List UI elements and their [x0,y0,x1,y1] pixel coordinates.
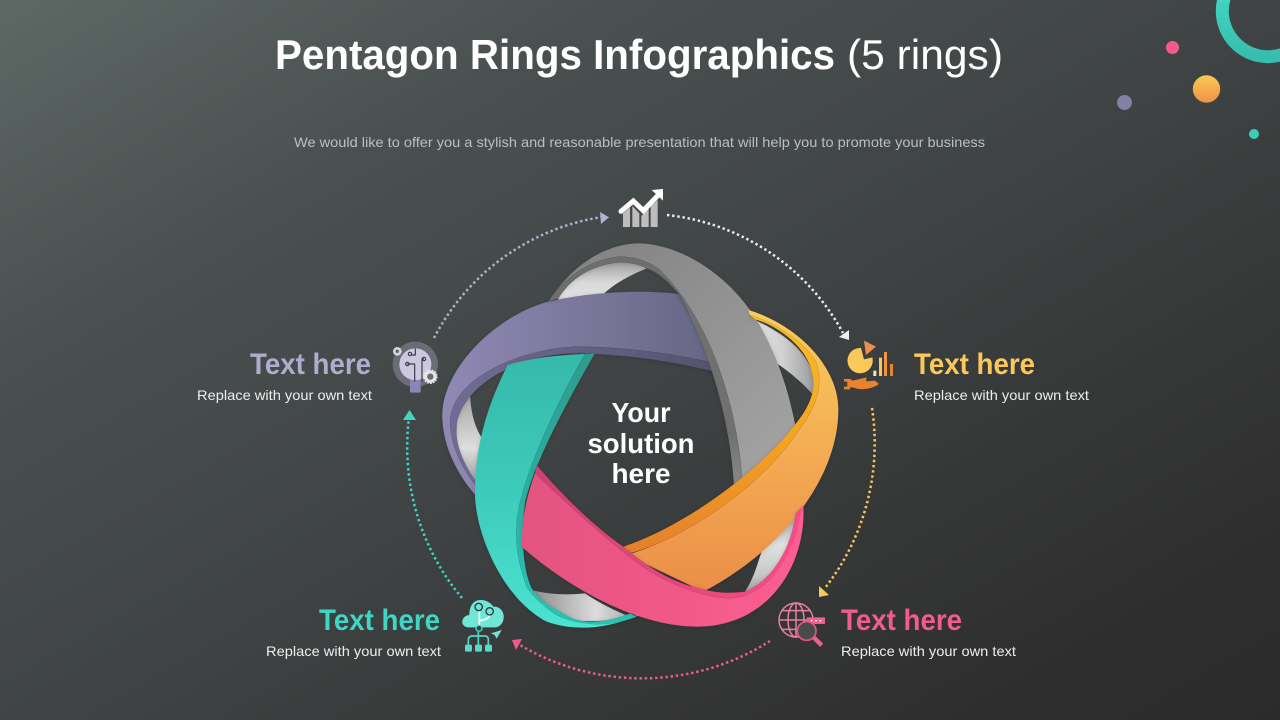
orange ring [623,310,838,592]
purple ring [442,292,717,497]
arrow: orange to pink [819,408,875,597]
icon: light bulb with gears [393,342,438,393]
label: teal [266,604,441,659]
icon: globe search [779,603,825,645]
icon: pie chart and hand [844,341,893,389]
subtitle: We would like to offer you a stylish and reasonable presentation that will help you to promote your business [294,134,985,150]
pink ring [522,465,804,627]
center text [588,397,694,489]
label: teal: Text here [319,604,440,637]
label: purple [197,348,372,403]
label: purple: Text here [250,348,371,381]
label: purple: Replace with your own text [197,387,372,403]
center text: Your [612,397,671,428]
title: Pentagon Rings Infographics [275,31,835,78]
label: pink [841,604,1016,659]
dotted arrows ring [403,212,875,678]
arrow: pink to teal [512,639,770,678]
center text: here [612,458,670,489]
gray ring [548,243,797,492]
label: orange: Replace with your own text [914,387,1089,403]
arrow: purple to chart [434,212,609,338]
teal ring [475,353,643,628]
icon: rising chart [621,189,663,227]
label: pink: Replace with your own text [841,643,1016,659]
label: orange: Text here [914,348,1035,381]
title: (5 rings) [847,31,1003,78]
icon: cloud network [462,600,504,652]
arrow: chart to orange [667,215,849,340]
label: orange [914,348,1089,403]
arrow: teal to purple [403,410,462,598]
decorative ring and dots [1117,0,1280,139]
label: pink: Text here [841,604,962,637]
center text: solution [588,428,694,459]
inner silver faces [456,262,815,621]
label: teal: Replace with your own text [266,643,441,659]
pentagon rings [442,243,838,628]
